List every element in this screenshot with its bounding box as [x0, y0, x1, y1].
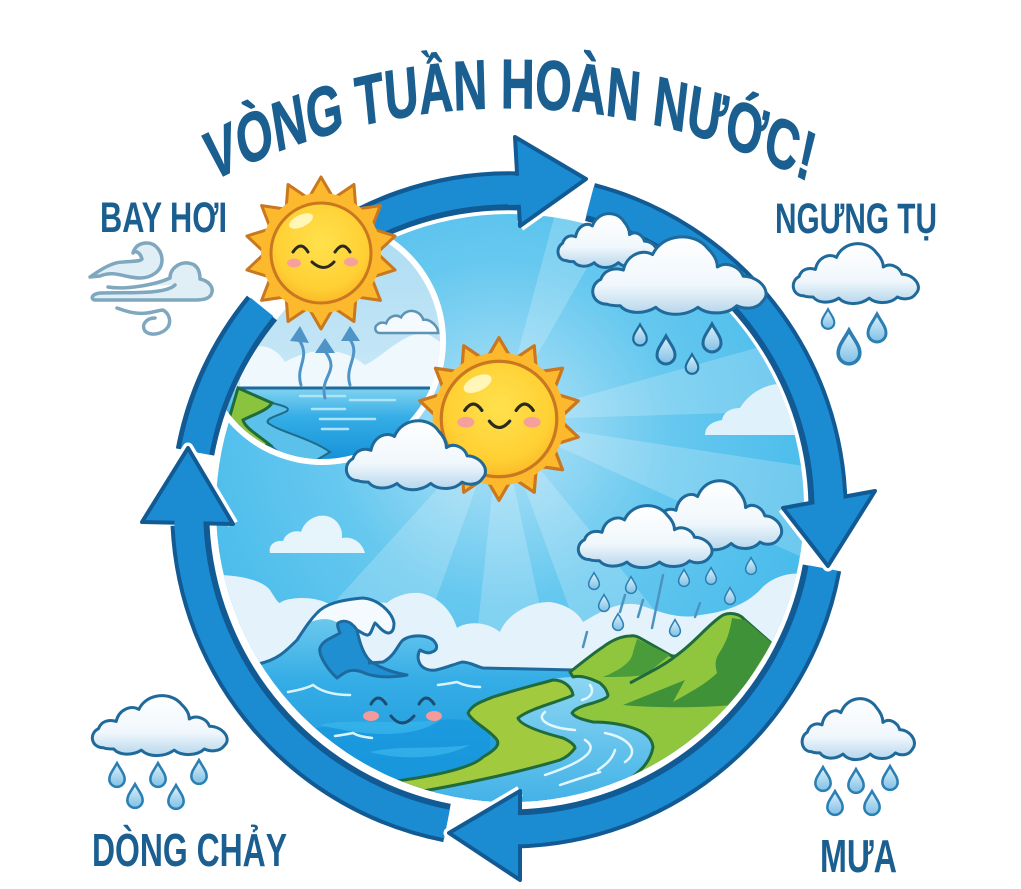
inset land	[229, 386, 274, 446]
label: bay hơi: BAY HƠI	[100, 194, 227, 242]
sea face	[363, 698, 442, 723]
ring: right upper arc	[590, 201, 829, 505]
icon: rain cloud right	[802, 699, 914, 815]
sea light bands	[320, 720, 470, 757]
cloud: back mid	[653, 481, 782, 550]
icon: wind	[90, 243, 212, 334]
cloud: back top	[558, 214, 658, 268]
label: mưa: MƯA	[820, 830, 897, 882]
hill line	[630, 655, 677, 683]
scene clouds top	[558, 214, 766, 314]
sea highlights	[288, 682, 480, 738]
inset highlights	[300, 396, 395, 429]
wave barrel	[320, 621, 407, 678]
panel: central scene	[216, 214, 804, 802]
sun rays	[336, 218, 804, 632]
arrow: left	[142, 448, 233, 524]
big hill shade	[623, 618, 772, 707]
label: ngưng tụ: NGƯNG TỤ	[775, 195, 937, 243]
rain	[583, 558, 756, 647]
sea and wave body	[260, 608, 600, 802]
pale cloud right	[705, 384, 795, 435]
sun: evaporation	[244, 177, 398, 329]
arrow: bottom	[449, 791, 520, 880]
ring: left upper arc	[195, 307, 262, 452]
sun: main	[416, 338, 582, 500]
river highlights	[542, 685, 632, 785]
ring: top arc	[300, 190, 522, 269]
cloud: in front of main sun	[346, 421, 485, 490]
cloud: front top	[593, 237, 766, 314]
background clouds	[215, 573, 810, 690]
drops under top clouds	[633, 324, 721, 374]
sea shading	[315, 720, 490, 794]
arrow joints	[189, 190, 829, 830]
inset small cloud	[375, 311, 438, 333]
evaporation arrows	[298, 338, 354, 398]
scene clouds mid	[578, 481, 782, 568]
arrow: right	[783, 491, 875, 566]
label: dòng chảy: DÒNG CHẢY	[92, 824, 287, 876]
pale small cloud	[270, 516, 365, 553]
ring: left lower arc	[189, 525, 447, 824]
right land	[568, 612, 772, 776]
arrow tips	[290, 326, 360, 353]
inset sea	[226, 389, 430, 459]
cloud: front mid	[578, 506, 712, 568]
icon: rain cloud left	[92, 696, 227, 809]
inset clouds	[240, 332, 445, 388]
river	[429, 677, 650, 802]
ring: right lower arc	[515, 568, 823, 830]
small hill shade	[603, 639, 670, 677]
panel: evaporation inset	[226, 240, 446, 465]
wave outline	[258, 598, 575, 670]
left land strip	[390, 680, 575, 792]
wave crest	[312, 600, 392, 634]
arrow: top	[515, 137, 586, 226]
arrow halos	[142, 137, 875, 880]
title: VÒNG TUẦN HOÀN NƯỚC!	[201, 50, 816, 180]
icon: condensation cloud	[793, 244, 918, 364]
inset river	[245, 402, 332, 459]
